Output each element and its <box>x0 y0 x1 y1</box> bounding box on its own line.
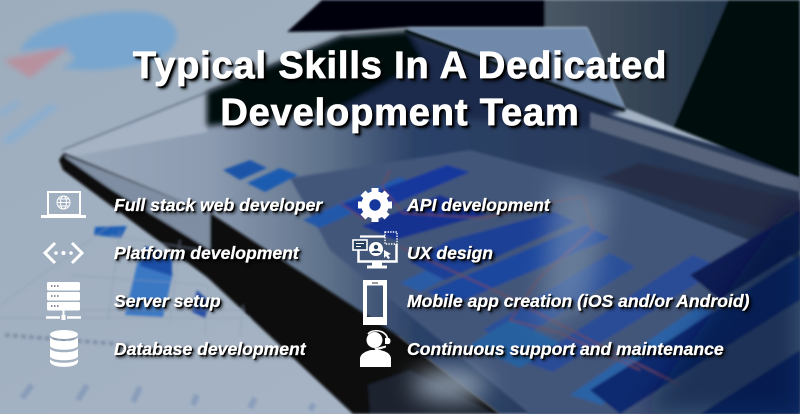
light screen corner <box>62 94 207 158</box>
title: Typical Skills In A Dedicated <box>133 45 667 87</box>
skill: server setup: Server setup <box>114 291 221 311</box>
screen stripes <box>290 150 800 414</box>
icon: gear <box>358 188 392 222</box>
skill: continuous support and maintenance: Continuous support and maintenance <box>407 339 724 359</box>
icon: code arrows <box>45 243 82 263</box>
skill: API development: API development <box>407 195 550 215</box>
dark shadow under device top <box>340 31 625 128</box>
icon: database stack <box>50 330 78 367</box>
top dark of device <box>287 0 545 32</box>
title <box>132 45 668 138</box>
icon: mobile phone <box>363 280 387 325</box>
skill: platform development: Platform development <box>114 243 299 263</box>
grey tablet rim <box>590 112 800 192</box>
skill: mobile app creation: Mobile app creation (iOS and/or Android) <box>407 291 749 311</box>
icon: UX design monitor <box>353 232 397 268</box>
skill: database development: Database development <box>114 339 306 359</box>
paper chart under tablet <box>94 226 127 238</box>
skill: UX design: UX design <box>407 243 493 263</box>
icon: server rack <box>46 282 81 320</box>
skill: full stack web developer: Full stack web developer <box>114 195 322 215</box>
reflection on lower bezel <box>412 369 488 401</box>
black tablet bezel <box>59 153 500 414</box>
trend line <box>340 170 680 385</box>
icon: support agent with headset <box>360 331 391 367</box>
title: Development Team <box>220 92 580 134</box>
icon: laptop with globe <box>41 192 86 216</box>
chart bars <box>223 160 267 180</box>
